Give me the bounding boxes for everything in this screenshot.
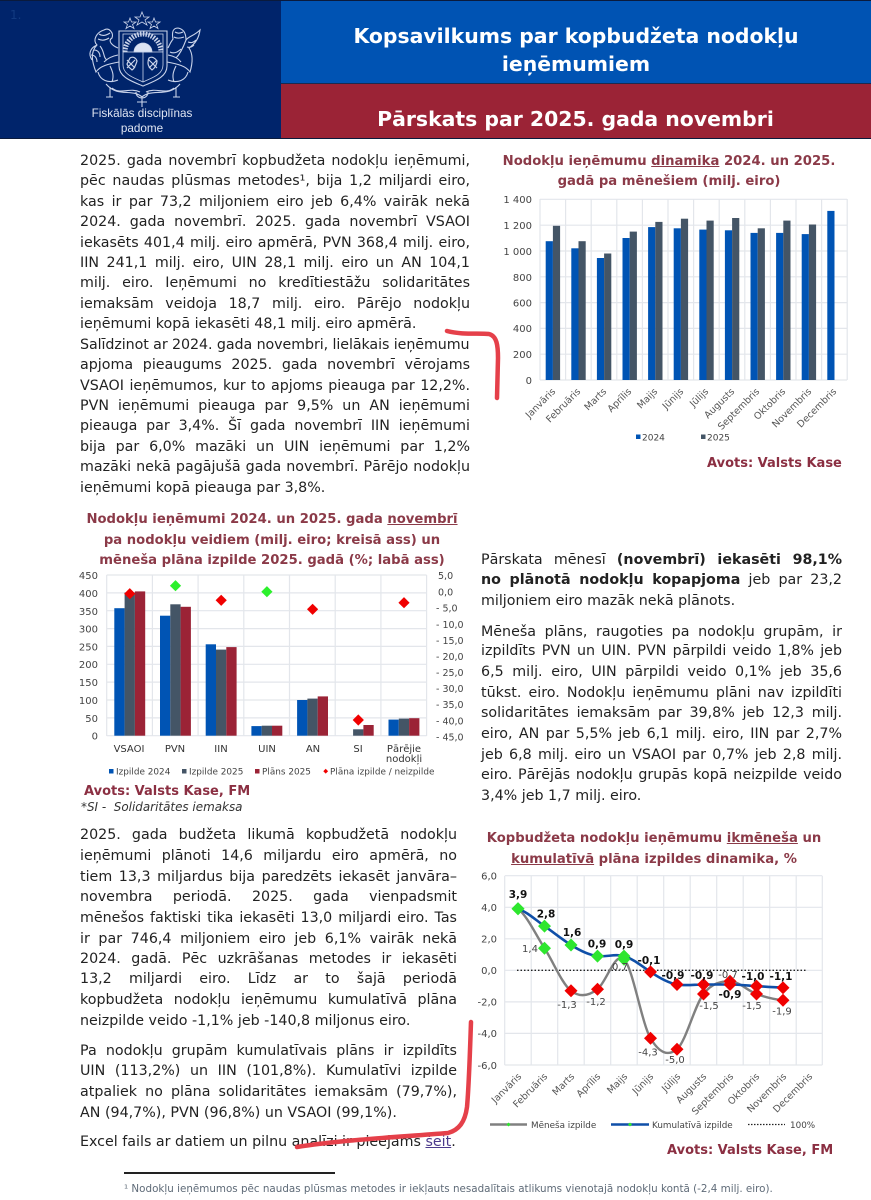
markers: plan execution — [124, 580, 410, 726]
text block: plan execution in November: no plānotā nodokļu kopapjoma jeb par 23,2 — [481, 572, 842, 588]
x axis labels: Novembris — [745, 1071, 789, 1115]
x axis labels: Maijs — [635, 386, 660, 411]
right axis labels: - 20,0 — [436, 652, 464, 663]
x axis labels: Oktobris — [726, 1071, 762, 1107]
right axis labels: - 5,0 — [436, 604, 458, 614]
x axis labels: Oktobris — [752, 386, 788, 422]
text block: plan execution in November: solidaritātes iemaksām par 39,8% jeb 12,3 milj. — [481, 705, 842, 721]
data labels: cumulative: 0,9 — [615, 939, 633, 951]
y axis labels: 1 200 — [503, 221, 532, 232]
chart title: kumulatīvā plāna izpildes dinamika, % — [511, 852, 797, 867]
text block: cumulative plan by tax group: atpaliek no plāna solidaritātes iemaksām (79,7%), — [80, 1084, 457, 1100]
x axis labels: Maijs — [605, 1071, 630, 1096]
text block: annual budget: novembra periodā. 2025. gada vienpadsmit — [80, 889, 457, 905]
chart title: pa nodokļu veidiem (milj. eiro; kreisā ass) un — [104, 532, 440, 548]
legend: 2025 — [707, 434, 730, 444]
x axis labels: Marts — [583, 386, 609, 413]
organisation name: padome — [121, 122, 163, 135]
text block: annual budget: ieņēmumi plānoti 14,6 miljardu eiro apmērā, no — [80, 848, 457, 864]
data labels: monthly: -1,2 — [586, 997, 606, 1008]
panel: tax type chart — [79, 512, 464, 814]
category labels: AN — [306, 744, 320, 755]
text block: plan execution in November: 3,4% jeb 1,7 milj. eiro. — [481, 788, 641, 804]
left axis labels: 350 — [79, 607, 98, 618]
data labels: cumulative: -1,1 — [770, 971, 792, 983]
organisation name: Fiskālās disciplīnas — [92, 107, 192, 120]
y axis labels: 1 400 — [503, 195, 532, 206]
text block: November revenue summary: milj. eiro. Ieņēmumi no kredītiestāžu solidaritātes — [80, 275, 470, 291]
chart title — [86, 512, 458, 568]
left axis labels: 300 — [79, 624, 98, 636]
text block: annual budget — [80, 827, 457, 1029]
right axis labels: 5,0 — [438, 571, 453, 582]
y axis labels: 200 — [513, 350, 532, 361]
text block: plan execution in November: izpildīts PVN un UIN. PVN pārpildi veido 1,8% jeb — [481, 643, 842, 659]
panel: plan execution dynamics chart — [477, 831, 833, 1158]
data labels: cumulative: -0,9 — [662, 970, 684, 982]
right axis labels: - 45,0 — [436, 732, 464, 744]
text block: plan execution in November: tūkst. eiro. Nodokļu ieņēmumu plāni nav izpildīti — [481, 685, 842, 701]
data labels: cumulative: 1,6 — [563, 927, 581, 939]
source note: Avots: Valsts Kase — [707, 456, 842, 471]
left axis labels: 200 — [79, 660, 98, 671]
chart title: Kopbudžeta nodokļu ieņēmumu ikmēneša un — [487, 831, 821, 846]
x axis labels: Janvāris — [523, 386, 558, 421]
data labels: monthly: 0,7 — [612, 962, 628, 973]
y axis labels: 0 — [526, 376, 532, 387]
text block: annual budget: kopbudžeta nodokļu ieņēmumu kumulatīvā plāna — [80, 992, 457, 1008]
combo chart: revenue bars and plan execution markers — [79, 571, 464, 778]
text block: annual budget: mēnešos faktiski tika iekasēti 13,0 miljardi eiro. Tas — [80, 910, 457, 926]
legend — [109, 768, 434, 778]
line: monthly execution — [518, 909, 783, 1053]
text block: cumulative plan by tax group: Excel fails ar datiem un pilnu analīzi ir pieejams šeit. — [80, 1134, 456, 1150]
y axis labels: -6,0 — [477, 1061, 497, 1072]
data labels: monthly: -1,9 — [772, 1006, 792, 1018]
text block: cumulative plan by tax group: Pa nodokļu grupām kumulatīvais plāns ir izpildīts — [80, 1043, 457, 1059]
left axis labels: 400 — [79, 589, 98, 600]
legend: 100% — [790, 1121, 815, 1131]
chart title — [503, 154, 835, 189]
category labels: nodokļi — [386, 754, 422, 765]
panel: red subtitle bar — [281, 83, 871, 138]
text block: November revenue summary: PVN ieņēmumi pieauga par 9,5% un AN ieņēmumi — [80, 398, 470, 414]
right axis labels: - 40,0 — [436, 716, 464, 728]
x axis labels: Decembris — [771, 1071, 815, 1115]
y axis labels: 4,0 — [481, 903, 497, 914]
x axis labels: Augusts — [674, 1071, 709, 1106]
text block: annual budget: ir par 746,4 miljoniem eiro jeb 6,1% vairāk nekā — [80, 931, 457, 947]
title: Kopsavilkums par kopbudžeta nodokļu — [353, 24, 799, 48]
y axis labels: 1 000 — [503, 247, 532, 258]
data labels: cumulative: 0,9 — [588, 938, 606, 950]
text block: plan execution in November: eiro, AN par 5,5% jeb 6,1 milj. eiro, IIN par 2,7% — [481, 726, 842, 742]
chart title: Nodokļu ieņēmumu dinamika 2024. un 2025. — [503, 154, 835, 169]
text block: annual budget: 13,2 miljardi eiro. Līdz ar to šajā periodā — [80, 971, 457, 987]
data labels: cumulative: -0,9 — [691, 970, 713, 982]
x axis labels: Marts — [551, 1071, 577, 1098]
header banner — [0, 0, 871, 139]
text block: November revenue summary: ieņēmumi kopā pieauga par 3,8%. — [80, 480, 325, 496]
y axis labels: 800 — [513, 273, 532, 284]
right axis labels: - 30,0 — [436, 684, 464, 695]
panel: navy logo block — [0, 1, 281, 138]
category labels: SI — [353, 744, 363, 755]
icon: Latvian coat of arms — [89, 11, 201, 107]
y axis labels: 400 — [513, 324, 532, 335]
chart title: Nodokļu ieņēmumi 2024. un 2025. gada novembrī — [86, 512, 458, 527]
text block: annual budget: neizpilde veido -1,1% jeb -140,8 miljonus eiro. — [80, 1013, 410, 1029]
markers: cumulative — [512, 902, 790, 994]
x axis labels: Janvāris — [489, 1071, 524, 1106]
panel: blue title bar — [281, 1, 871, 83]
x axis labels: Jūlijs — [659, 1071, 683, 1095]
right axis labels: 0,0 — [438, 588, 453, 598]
x axis labels: Jūlijs — [687, 386, 711, 410]
bars: 2024 — [546, 211, 834, 380]
category labels: IIN — [214, 744, 228, 755]
left axis labels: 250 — [79, 642, 98, 654]
text block: plan execution in November: eiro. Pārējās nodokļu grupās kopā neizpilde veido — [481, 767, 842, 783]
chart title: mēneša plāna izpilde 2025. gadā (%; labā ass) — [99, 553, 445, 568]
text block: November revenue summary: bija par 6,0% mazāki un UIN ieņēmumi par 1,2% — [80, 439, 470, 455]
y axis labels — [503, 195, 532, 387]
text block: November revenue summary: pieauga par 3,4%. Šī gada novembrī IIN ieņēmumi — [80, 418, 470, 434]
right axis labels — [436, 571, 464, 744]
text block: November revenue summary: kas ir par 73,2 miljoniem eiro jeb 6,4% vairāk nekā — [80, 194, 470, 210]
text block: cumulative plan by tax group: UIN (113,2%) un IIN (101,8%). Kumulatīvi izpilde — [80, 1063, 457, 1079]
legend: Plāns 2025 — [262, 768, 311, 778]
y axis labels: 2,0 — [481, 934, 497, 946]
text block: annual budget: 2025. gada budžeta likumā kopbudžetā nodokļu — [80, 827, 457, 843]
line: cumulative execution — [518, 909, 783, 988]
text block: November revenue summary: 2024. gada novembrī. 2025. gada novembrī VSAOI — [80, 214, 470, 230]
data labels: monthly: -0,7 — [718, 970, 738, 981]
category labels: PVN — [165, 744, 185, 755]
bars: Plāns 2025 — [135, 591, 419, 736]
bars: Izpilde 2025 — [125, 592, 409, 736]
left axis labels: 450 — [79, 571, 98, 582]
legend: Izpilde 2025 — [189, 768, 243, 778]
data labels: monthly: 1,4 — [522, 944, 538, 955]
title — [353, 24, 799, 76]
line chart: monthly and cumulative execution — [477, 872, 823, 1131]
x axis labels: Februāris — [511, 1071, 550, 1110]
legend: Izpilde 2024 — [116, 768, 171, 778]
line: 100% reference — [517, 969, 807, 971]
footnote text: ¹ Nodokļu ieņēmumos pēc naudas plūsmas metodes ir iekļauts nesadalītais atlikums vienotajā nodokļu kontā (-2,4 milj. eiro). — [124, 1183, 773, 1195]
right axis labels: - 15,0 — [436, 636, 464, 647]
x axis labels: Februāris — [544, 386, 583, 425]
title: ieņēmumiem — [502, 52, 650, 76]
x axis labels: Augusts — [702, 386, 737, 421]
y axis labels: 6,0 — [481, 872, 497, 882]
source note: Avots: Valsts Kase, FM — [84, 784, 250, 799]
text block: November revenue summary: IIN 241,1 milj. eiro, UIN 28,1 milj. eiro un AN 104,1 — [80, 255, 470, 271]
text block: plan execution in November: miljoniem eiro mazāk nekā plānots. — [481, 593, 735, 609]
text block: November revenue summary: Salīdzinot ar 2024. gada novembri, lielākais ieņēmumu — [80, 337, 469, 353]
arrow: red hand-drawn bracket, bottom — [294, 1020, 474, 1150]
text block: November revenue summary: pēc naudas plūsmas metodes¹, bija 1,2 miljardi eiro, — [80, 173, 470, 189]
legend: Kumulatīvā izpilde — [652, 1121, 733, 1131]
left axis labels: 150 — [79, 678, 98, 689]
source note: Avots: Valsts Kase, FM — [667, 1143, 833, 1158]
category labels: VSAOI — [114, 744, 144, 755]
arrow: red hand-drawn bracket, top — [444, 328, 500, 400]
y axis labels: -4,0 — [477, 1029, 497, 1040]
text block: cumulative plan by tax group: AN (94,7%), PVN (96,8%) un VSAOI (99,1%). — [80, 1105, 397, 1121]
x axis labels: Jūnijs — [630, 1071, 656, 1098]
subtitle: Pārskats par 2025. gada novembri — [377, 107, 774, 131]
x axis labels: Decembris — [795, 386, 839, 430]
panel: monthly dynamics chart — [503, 154, 848, 471]
bars: Izpilde 2024 — [114, 608, 399, 736]
text block: plan execution in November — [480, 552, 842, 804]
text block: plan execution in November: 6,5 milj. eiro, UIN pārpildi veido 0,1% jeb 35,6 — [481, 664, 842, 680]
x axis labels: Novembris — [770, 386, 814, 430]
data labels: cumulative — [509, 889, 792, 1001]
left axis labels — [79, 571, 98, 742]
left axis labels: 50 — [85, 714, 98, 725]
x axis labels: Septembris — [690, 1071, 736, 1117]
data labels: cumulative: -0,1 — [638, 955, 660, 967]
left axis labels: 100 — [79, 696, 98, 707]
chart title: gadā pa mēnešiem (milj. eiro) — [558, 174, 780, 189]
x axis labels: Aprīlis — [606, 386, 634, 415]
x axis labels: Septembris — [716, 386, 762, 432]
data labels: monthly: -4,3 — [638, 1048, 658, 1058]
right axis labels: - 25,0 — [436, 668, 464, 679]
category labels — [114, 744, 422, 765]
legend — [490, 1120, 815, 1131]
y axis labels: 0,0 — [481, 966, 497, 977]
text block: November revenue summary: apjoma pieaugums 2025. gada novembrī vērojams — [80, 357, 470, 373]
data labels: monthly: -1,5 — [699, 1001, 719, 1012]
text block: plan execution in November: Pārskata mēnesī (novembrī) iekasēti 98,1% — [481, 552, 842, 568]
x axis labels — [489, 1071, 815, 1117]
category labels: Pārējie — [387, 744, 421, 755]
y axis labels — [477, 872, 497, 1072]
y axis labels: -2,0 — [477, 998, 497, 1008]
text block: November revenue summary: iemaksām veidoja 18,7 milj. eiro. Pārējo nodokļu — [80, 296, 470, 312]
text block: November revenue summary: 2025. gada novembrī kopbudžeta nodokļu ieņēmumi, — [80, 153, 470, 169]
x axis labels: Jūnijs — [660, 386, 686, 413]
x axis labels — [523, 386, 839, 432]
data labels: cumulative: 2,8 — [537, 908, 555, 920]
x axis labels: Aprīlis — [575, 1071, 603, 1100]
right axis labels: - 10,0 — [436, 620, 464, 631]
text block: annual budget: tiem 13,3 miljardus bija paredzēts iekasēt janvāra– — [80, 869, 457, 885]
footnote: SI abbreviation: *SI - Solidaritātes iemaksa — [81, 800, 242, 814]
left axis labels: 0 — [92, 732, 98, 742]
right axis labels: - 35,0 — [436, 700, 464, 711]
text block: annual budget: 2024. gadā. Pēc uzkrāšanas metodes ir iekasēti — [80, 951, 457, 967]
text block: November revenue summary: mazāki nekā pagājušā gada novembrī. Pārējo nodokļu — [80, 459, 470, 475]
text block: November revenue summary — [80, 153, 470, 496]
legend: 2024 — [642, 434, 665, 444]
legend: Plāna izpilde / neizpilde — [330, 768, 434, 778]
data labels: monthly: -1,3 — [557, 1000, 577, 1011]
bar chart: monthly revenue — [503, 195, 848, 444]
text block: plan execution in November: jeb 6,8 milj. eiro un VSAOI par 0,7% jeb 2,8 milj. — [481, 747, 842, 763]
data labels: cumulative: 3,9 — [509, 889, 527, 901]
page number mark: 1. — [10, 8, 21, 22]
markers: monthly — [512, 902, 790, 1056]
legend — [636, 434, 730, 444]
text block: November revenue summary: iekasēts 401,4 milj. eiro apmērā, PVN 368,4 milj. eiro, — [80, 235, 470, 251]
text block: plan execution in November: Mēneša plāns, raugoties pa nodokļu grupām, ir — [481, 624, 842, 640]
organisation name — [92, 107, 192, 135]
data labels: cumulative: -1,0 — [742, 971, 764, 983]
category labels: UIN — [258, 744, 276, 755]
chart title — [487, 831, 821, 867]
data labels: monthly: -5,0 — [665, 1055, 685, 1066]
text block: November revenue summary: ieņēmumi kopā iekasēti 48,1 milj. eiro apmērā. — [80, 316, 416, 332]
y axis labels: 600 — [513, 298, 532, 310]
data labels: cumulative: -0,9 — [719, 989, 741, 1001]
bars: 2025 — [553, 218, 816, 380]
text block: cumulative plan by tax group — [80, 1043, 457, 1150]
legend: Mēneša izpilde — [531, 1120, 596, 1131]
text block: November revenue summary: VSAOI ieņēmumos, kur to apjoms pieauga par 12,2%. — [80, 378, 470, 394]
data labels: monthly: -1,5 — [742, 1001, 762, 1012]
data labels: monthly — [522, 944, 792, 1066]
